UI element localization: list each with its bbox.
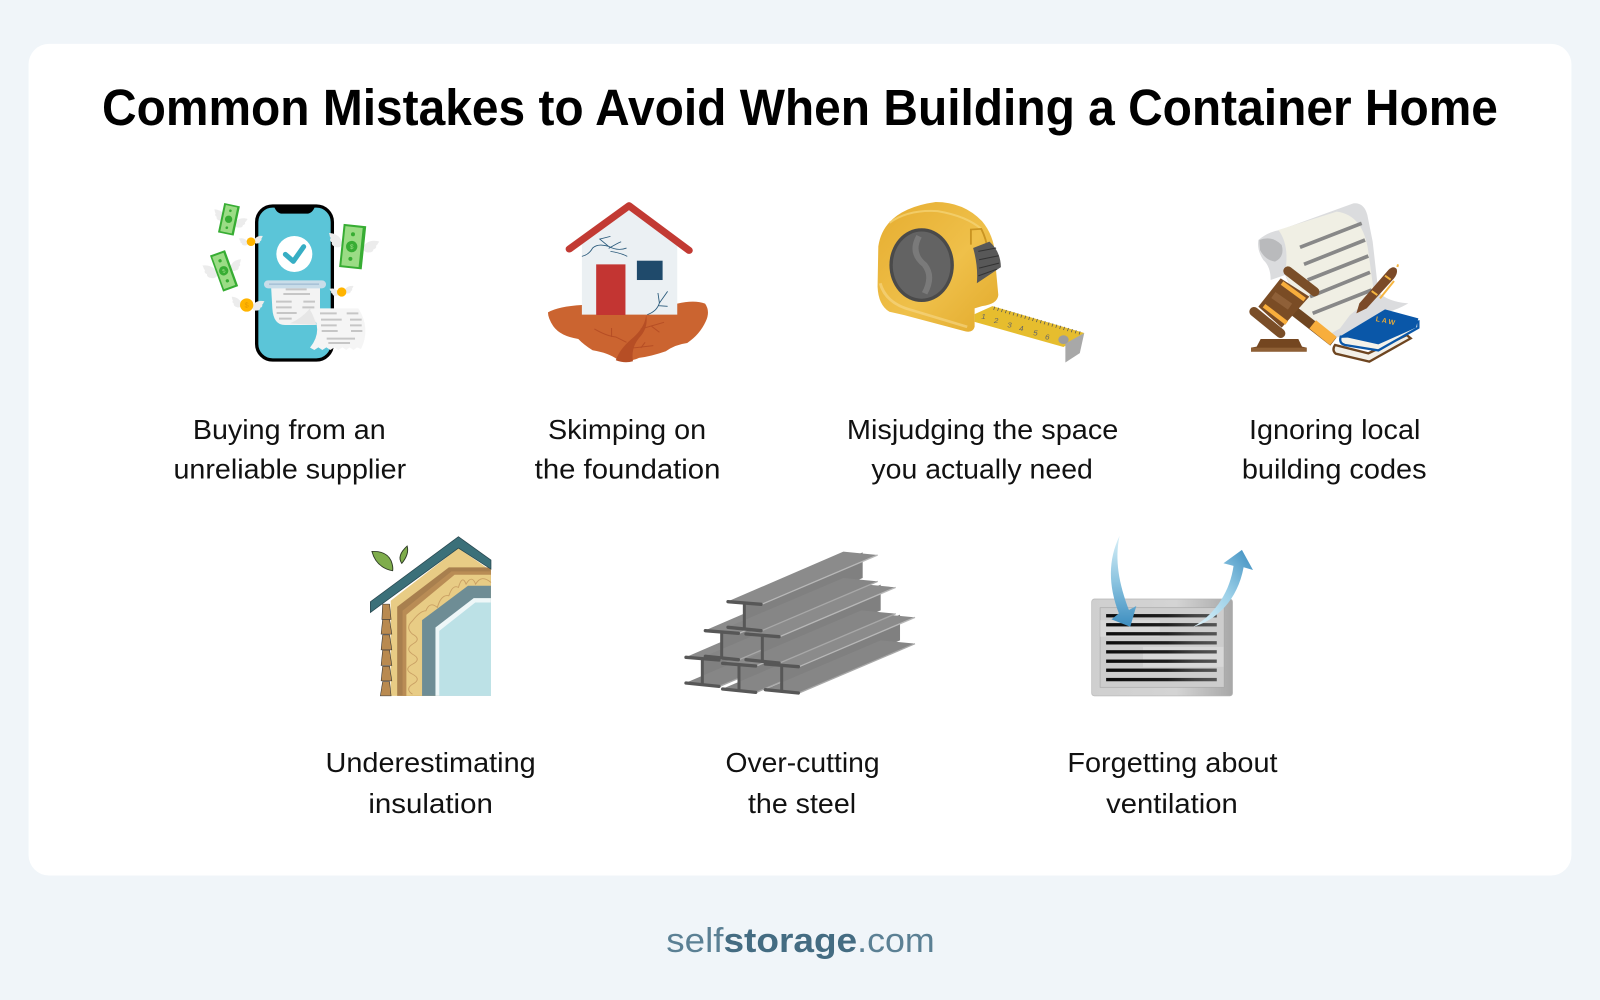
label: misjudging the space you actually need: Misjudging the space xyxy=(847,414,1118,445)
icon: tape measure: 4 xyxy=(1019,324,1024,333)
label: misjudging the space you actually need: you actually need xyxy=(871,454,1093,485)
icon: tape measure: 5 xyxy=(1033,329,1038,338)
icon: phone with receipts and flying money xyxy=(201,203,379,360)
label: ignoring local building codes: building codes xyxy=(1242,454,1427,485)
icon: tape measure: 6 xyxy=(1045,333,1050,342)
books xyxy=(1333,335,1411,362)
label: over-cutting the steel: Over-cutting xyxy=(726,747,880,778)
label: underestimating insulation: Underestimating xyxy=(326,747,536,778)
icon: cracked house on foundation xyxy=(548,206,708,362)
icon: vent with airflow arrows xyxy=(1092,536,1253,696)
label: misjudging the space you actually need xyxy=(847,414,1118,485)
label: underestimating insulation xyxy=(326,747,536,819)
icon: wall insulation cross-section xyxy=(370,537,491,696)
label: buying from an unreliable supplier xyxy=(173,414,406,485)
footer logo: selfstorage.com: storage xyxy=(723,922,857,960)
icon: tape measure: 2 xyxy=(993,316,999,325)
wings xyxy=(211,209,227,222)
label: ignoring local building codes: Ignoring local xyxy=(1249,414,1420,445)
label: buying from an unreliable supplier: unreliable supplier xyxy=(173,454,406,485)
pen xyxy=(1356,267,1397,313)
label: skimping on the foundation: the foundation xyxy=(535,454,720,485)
label: skimping on the foundation xyxy=(535,414,720,485)
label: forgetting about ventilation: Forgetting about xyxy=(1067,747,1278,778)
icon: tape measure: 1 xyxy=(981,312,986,321)
coins xyxy=(247,237,255,246)
label: forgetting about ventilation: ventilation xyxy=(1106,788,1238,819)
footer logo: selfstorage.com: self xyxy=(666,922,724,960)
label: ignoring local building codes xyxy=(1242,414,1427,485)
icon: law scroll, gavel and books: LAW xyxy=(1375,316,1397,327)
icon: phone with receipts and flying money: $ xyxy=(245,301,249,310)
icon: law scroll, gavel and books xyxy=(1251,203,1418,362)
label: forgetting about ventilation xyxy=(1067,747,1278,819)
item: building codes xyxy=(1242,203,1427,485)
item: insulation xyxy=(326,537,536,819)
label: underestimating insulation: insulation xyxy=(368,788,493,819)
label: buying from an unreliable supplier: Buying from an xyxy=(193,414,386,445)
label: over-cutting the steel xyxy=(726,747,880,819)
icon: tape measure xyxy=(878,202,1084,362)
item: over-cutting steel xyxy=(685,552,915,819)
item: unreliable supplier xyxy=(173,203,406,485)
bills xyxy=(218,203,240,236)
item: misjudging space xyxy=(847,202,1118,485)
footer logo: selfstorage.com xyxy=(666,922,935,960)
title: Common Mistakes to Avoid When Building a Container Home xyxy=(102,79,1498,136)
icon: tape measure: 3 xyxy=(1007,321,1012,329)
item: foundation xyxy=(535,206,720,485)
footer logo: selfstorage.com: .com xyxy=(857,922,935,960)
gavel xyxy=(1295,312,1333,342)
item: ventilation xyxy=(1067,536,1278,819)
icon: phone with receipts and flying money: $ xyxy=(349,244,354,251)
label: over-cutting the steel: the steel xyxy=(748,788,856,819)
icon: stacked steel I-beams xyxy=(685,552,915,693)
icon: phone with receipts and flying money: $ xyxy=(222,268,226,275)
label: skimping on the foundation: Skimping on xyxy=(548,414,706,445)
